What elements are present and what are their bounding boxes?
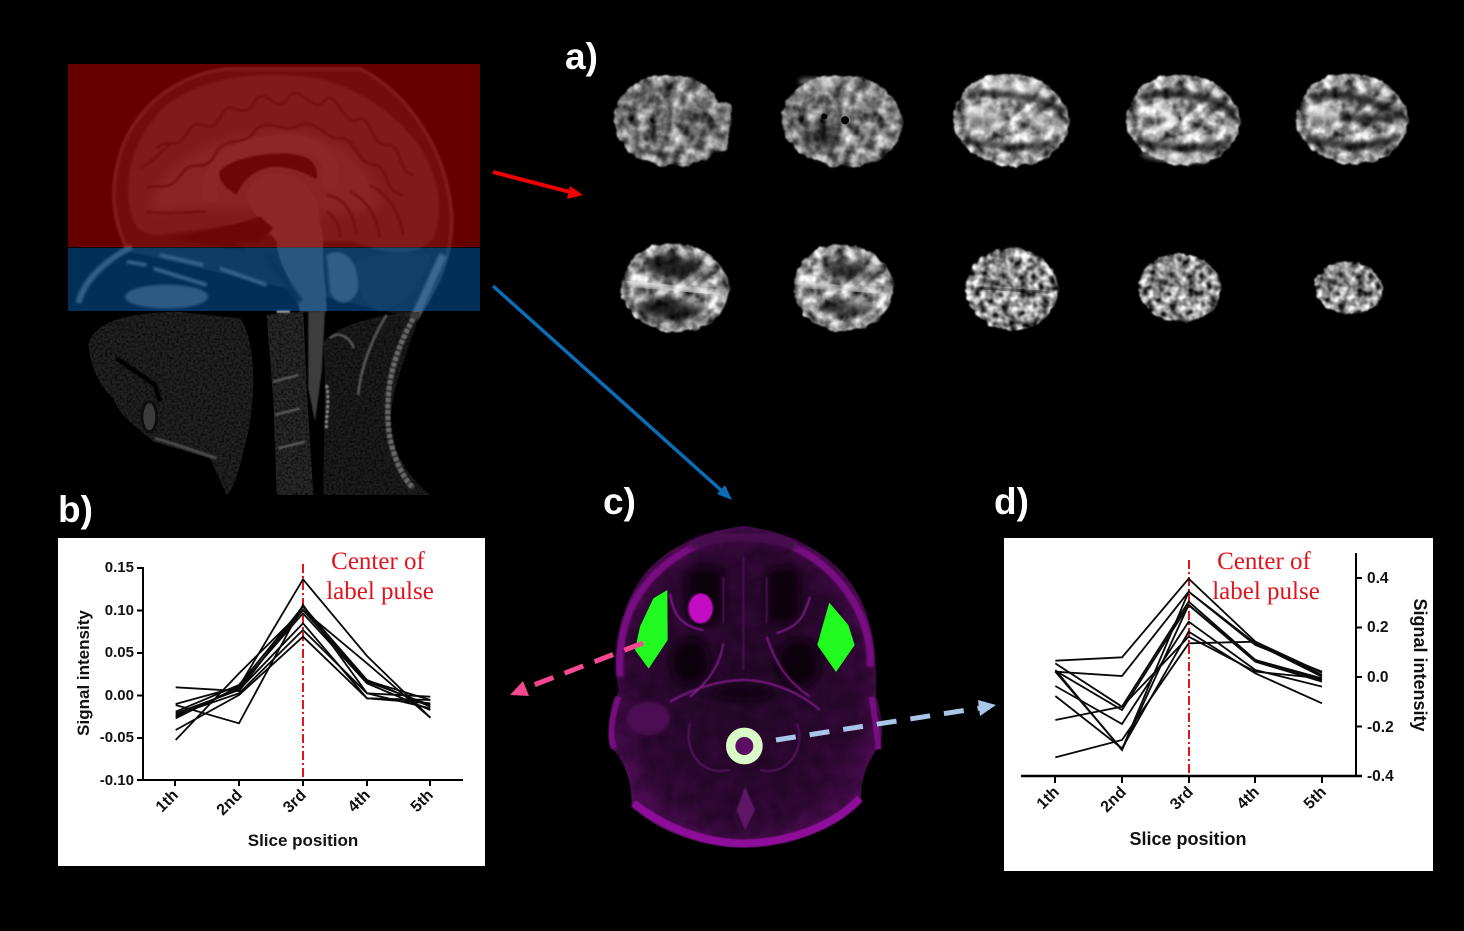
y tick labels: -0.10	[100, 772, 134, 789]
dorsal neck tissue	[323, 312, 430, 495]
axis title: slice position: Slice position	[248, 831, 358, 850]
annotation: center of label pulse	[1212, 548, 1320, 605]
arrow: light blue to chart d	[776, 700, 996, 740]
slice 9	[1137, 251, 1223, 325]
panel a: perfusion slices	[610, 69, 1412, 337]
blue overlay: lower slab	[68, 248, 480, 311]
corpus callosum	[210, 142, 331, 195]
x tick labels: 2nd	[214, 787, 246, 819]
cerebrum	[128, 75, 439, 253]
vertebra discs	[273, 375, 305, 448]
thalamus and brainstem	[255, 212, 328, 312]
y tick labels: -0.4	[1367, 768, 1394, 785]
ROI: right masseter	[817, 603, 855, 672]
x tick labels	[153, 787, 437, 819]
annotation: center of label pulse: label pulse	[1212, 578, 1320, 605]
slice 7	[790, 242, 896, 334]
lip oval	[142, 402, 157, 432]
chart background	[1004, 538, 1433, 871]
slice 4	[1122, 70, 1244, 170]
x tick labels: 1th	[1034, 784, 1063, 813]
label b: b)	[58, 489, 93, 530]
y tick labels: 0.00	[105, 687, 134, 704]
facial outer skin	[620, 545, 870, 677]
vertebrae column	[267, 312, 313, 495]
label c: c)	[603, 481, 636, 522]
y tick labels: 0.4	[1367, 570, 1389, 587]
arrow: pink to chart b	[510, 643, 643, 696]
occipital skin crescent	[633, 798, 860, 843]
arrow: blue to neck slice	[493, 286, 732, 500]
slice 1	[610, 69, 735, 172]
panel c: axial neck scan with ROIs	[609, 526, 882, 847]
y tick labels: -0.2	[1367, 719, 1394, 736]
panel b: ECA signal chart	[58, 538, 485, 866]
arrow: red to brain slices	[493, 172, 583, 199]
slice 8	[963, 245, 1061, 333]
spinal cord	[308, 312, 325, 422]
magenta sinus signal	[688, 593, 713, 623]
slice 6	[617, 239, 733, 337]
x tick labels: 5th	[408, 787, 437, 816]
white matter	[158, 144, 374, 209]
y tick labels: 0.15	[105, 559, 134, 576]
x tick labels: 2nd	[1098, 784, 1130, 816]
y tick labels	[100, 559, 134, 789]
internal tissue boundaries	[670, 557, 820, 830]
y tick labels	[1367, 570, 1394, 785]
panel: sagittal MRI with slab overlays	[68, 64, 480, 495]
label pulse center line	[302, 564, 304, 778]
bright neck stripes	[277, 312, 413, 488]
axis title: signal intensity: Signal intensity	[74, 610, 93, 736]
y tick labels: -0.05	[100, 729, 134, 746]
slice 2	[778, 70, 906, 172]
annotation: center of label pulse: label pulse	[326, 578, 434, 605]
y tick labels: 0.0	[1367, 669, 1389, 686]
subject lines	[176, 579, 430, 740]
panel d: cord signal chart	[1004, 538, 1433, 871]
annotation: center of label pulse	[326, 548, 434, 605]
y tick labels: 0.05	[105, 644, 134, 661]
red overlay: upper slab	[68, 64, 480, 247]
ROI: spinal cord ring	[731, 732, 758, 760]
label d: d)	[994, 481, 1029, 522]
head silhouette	[609, 526, 882, 847]
ROI: left masseter	[635, 590, 668, 669]
mouth line	[117, 358, 160, 402]
x tick labels: 4th	[345, 787, 374, 816]
cerebellar tissue	[374, 308, 384, 312]
y tick labels: 0.2	[1367, 619, 1389, 636]
y tick labels: 0.10	[105, 602, 134, 619]
side skin folds	[611, 697, 878, 749]
axes	[1021, 553, 1362, 783]
annotation: center of label pulse: Center of	[1217, 548, 1312, 575]
parotid patches	[627, 702, 670, 735]
chart background	[58, 538, 485, 866]
axis title: slice position: Slice position	[1129, 829, 1247, 849]
forehead tissue	[690, 537, 797, 547]
sinus cavities	[670, 567, 820, 700]
facial tissue and tongue	[88, 312, 253, 495]
axis title: signal intensity: Signal intensity	[1410, 598, 1430, 732]
subject lines	[1055, 579, 1322, 757]
slice 5	[1292, 69, 1412, 169]
skull base and face in slab	[78, 247, 443, 318]
label pulse center line	[1188, 560, 1190, 775]
cerebellum	[327, 252, 358, 303]
axes	[137, 567, 463, 786]
sinus dark area	[221, 216, 274, 248]
label a: a)	[565, 36, 598, 77]
x tick labels: 5th	[1301, 784, 1330, 813]
slice 10	[1313, 259, 1385, 317]
gyri folds	[140, 93, 413, 238]
x tick labels: 1th	[153, 787, 182, 816]
annotation: center of label pulse: Center of	[331, 548, 426, 575]
x tick labels: 3rd	[1167, 784, 1197, 813]
x tick labels	[1034, 784, 1330, 816]
scalp and skull outline	[114, 69, 452, 318]
x tick labels: 3rd	[280, 787, 310, 816]
ventricle	[219, 154, 317, 195]
lip lines	[155, 438, 217, 458]
sagittal head scan	[78, 69, 452, 495]
slice 3	[949, 69, 1073, 171]
x tick labels: 4th	[1234, 784, 1263, 813]
